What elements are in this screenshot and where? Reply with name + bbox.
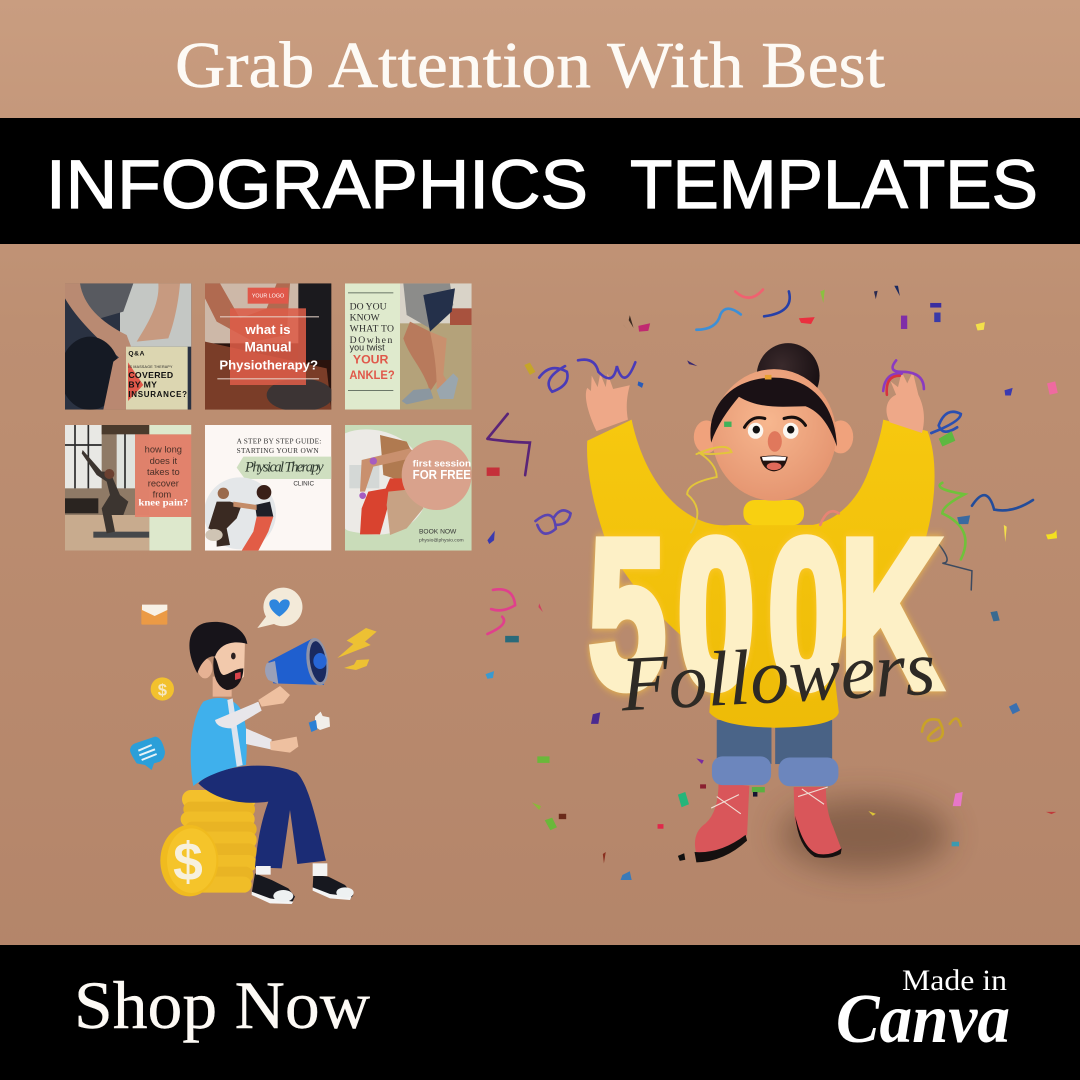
thumbnail: massage Q&A: INSURANCE? <box>128 390 187 399</box>
floor shadow <box>780 798 950 871</box>
500K glow: 500K <box>589 498 940 731</box>
500K number: 500K <box>589 498 940 731</box>
banner: infographics templates: TEMPLATES <box>630 146 1038 223</box>
thumbnail: twist your ankle: DO YOU <box>350 301 387 312</box>
thumbnail: step by step guide: Physical Therapy <box>244 460 324 476</box>
thumbnail: knee pain <box>65 425 191 551</box>
coin stack <box>181 790 257 893</box>
thumbnail: twist your ankle: ANKLE? <box>349 368 395 382</box>
hands <box>586 372 924 433</box>
thumbnail: step by step guide <box>204 425 331 551</box>
thumbnail: manual physiotherapy <box>205 283 333 412</box>
thumbnail: manual physiotherapy: Physiotherapy? <box>219 357 318 372</box>
thumbnail: first session for free: physio@physio.com <box>419 537 464 543</box>
icon: envelope <box>141 605 167 625</box>
thumbnail: first session for free <box>345 425 472 551</box>
icon: heart speech bubble <box>257 588 302 628</box>
shorts <box>712 720 838 786</box>
Followers script: Followers <box>618 623 937 728</box>
icon: chat bubble <box>130 737 165 770</box>
mouth <box>760 455 788 471</box>
shop now: Shop Now <box>74 967 370 1043</box>
icon: lightning bolts <box>337 628 377 670</box>
thumbnail: knee pain: from <box>153 489 172 499</box>
man: shoes <box>252 863 354 904</box>
thumbnail: twist your ankle: WHAT TO <box>350 324 394 335</box>
made in canva: Made in <box>902 964 1007 997</box>
panel: template thumbnails <box>60 283 472 551</box>
thumbnail: step by step guide: STARTING YOUR OWN <box>237 446 319 455</box>
thumbnail: manual physiotherapy: Manual <box>244 340 292 355</box>
thumbnail: first session for free: BOOK NOW <box>419 529 457 536</box>
man: legs <box>198 766 326 868</box>
big dollar coin <box>160 825 218 896</box>
thumbnail: massage Q&A: COVERED <box>128 370 173 380</box>
collar <box>743 500 804 525</box>
footer bar <box>0 945 1080 1080</box>
icon: dollar coin small: $ <box>158 680 168 699</box>
thumbnail: step by step guide: CLINIC <box>293 481 315 488</box>
icon: dollar coin small <box>151 677 174 701</box>
sweater <box>587 420 935 728</box>
made in canva: Canva <box>836 981 1010 1058</box>
thumbnail: step by step guide: A STEP BY STEP GUIDE: <box>237 437 321 446</box>
thumbnail: twist your ankle: you twist <box>350 342 385 352</box>
banner: infographics templates: INFOGRAPHICS <box>46 146 588 223</box>
bun <box>757 343 820 408</box>
thumbnail: massage Q&A: IS MASSAGE THERAPY <box>128 365 173 369</box>
nose <box>768 431 782 452</box>
man: shirt <box>191 698 247 786</box>
thumbnail: manual physiotherapy: what is <box>244 322 291 337</box>
streamers and confetti <box>487 290 1033 741</box>
thumbnail: massage Q&A: BY MY <box>128 379 157 389</box>
thumbnail: twist your ankle: DOwhen <box>350 335 393 346</box>
man: head <box>189 622 247 697</box>
thumbnail: twist your ankle: KNOW <box>350 313 381 324</box>
illustration: 500K followers character <box>486 286 1058 880</box>
man: arms <box>215 686 298 753</box>
thumbnail: knee pain: recover <box>148 478 179 488</box>
banner: infographics templates <box>0 118 1080 244</box>
heading: Grab Attention With Best: Grab Attention With Best <box>175 29 885 102</box>
thumbnail: twist your ankle <box>345 283 472 410</box>
face <box>712 369 836 501</box>
ears <box>694 420 853 453</box>
thumbnail: knee pain: does it <box>150 456 177 466</box>
thumbnail: knee pain: knee pain? <box>138 499 189 509</box>
thumbnail: first session for free: first session <box>413 458 471 468</box>
man: megaphone <box>265 636 331 687</box>
big dollar coin: $ <box>173 833 203 892</box>
thumbnail: knee pain: takes to <box>147 467 180 477</box>
thumbnail: massage Q&A <box>60 283 191 410</box>
illustration: man with megaphone on coins <box>130 588 377 904</box>
thumbnail: twist your ankle: YOUR <box>353 353 389 367</box>
hair <box>710 378 837 446</box>
icon: thumbs up <box>309 712 330 732</box>
thumbnail: first session for free: FOR FREE <box>413 468 471 482</box>
thumbnail: massage Q&A: Q&A <box>128 351 145 358</box>
boots <box>695 782 842 862</box>
thumbnail: knee pain: how long <box>145 445 182 455</box>
thumbnail: manual physiotherapy: YOUR LOGO <box>252 293 284 299</box>
eyes and brows <box>744 417 806 439</box>
